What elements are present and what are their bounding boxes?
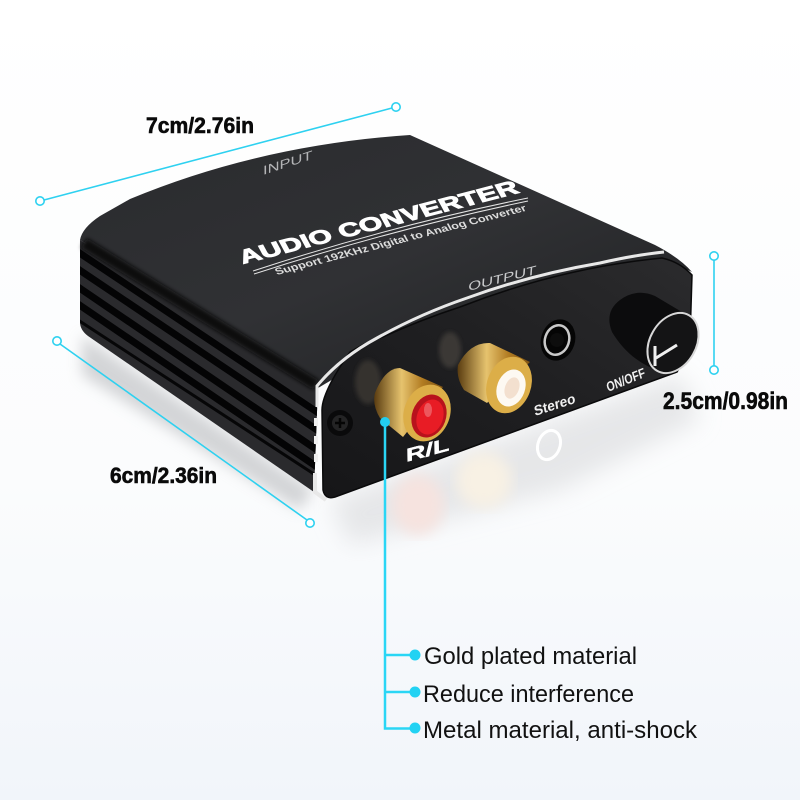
callout: connector features: Metal material, anti-shock xyxy=(423,717,698,744)
side panel with ridges xyxy=(78,235,323,497)
dimension: depth xyxy=(53,337,314,527)
label: ON/OFF: ON/OFF xyxy=(605,365,647,395)
connector lines xyxy=(385,422,415,728)
callout: connector features xyxy=(380,417,698,744)
callout: connector features: Reduce interference xyxy=(423,681,634,708)
top edge shadow xyxy=(84,243,316,385)
front panel xyxy=(322,258,692,498)
screw xyxy=(327,410,353,436)
device: audio converter xyxy=(78,135,709,500)
front chamfer highlight xyxy=(317,252,664,407)
top face xyxy=(80,135,692,388)
feature text: Gold plated material xyxy=(424,643,637,670)
label: Stereo: Stereo xyxy=(533,390,577,419)
subtitle: Support 192KHz Digital to Analog Converter xyxy=(273,203,529,277)
double underline xyxy=(253,198,528,274)
title: AUDIO CONVERTER: AUDIO CONVERTER xyxy=(234,176,523,268)
dimension: height xyxy=(663,252,788,415)
dimension: width xyxy=(36,103,400,205)
floor reflection xyxy=(82,335,700,545)
dimension: width: 7cm/2.76in xyxy=(146,113,254,138)
jack: red RCA xyxy=(355,360,459,448)
label: R/L: R/L xyxy=(406,433,450,466)
top label: OUTPUT: OUTPUT xyxy=(468,263,537,294)
dimension: depth: 6cm/2.36in xyxy=(110,463,217,488)
stereo jack xyxy=(535,315,581,365)
top label: INPUT: INPUT xyxy=(263,147,313,178)
knob xyxy=(609,293,709,382)
jack: white RCA xyxy=(439,332,540,420)
